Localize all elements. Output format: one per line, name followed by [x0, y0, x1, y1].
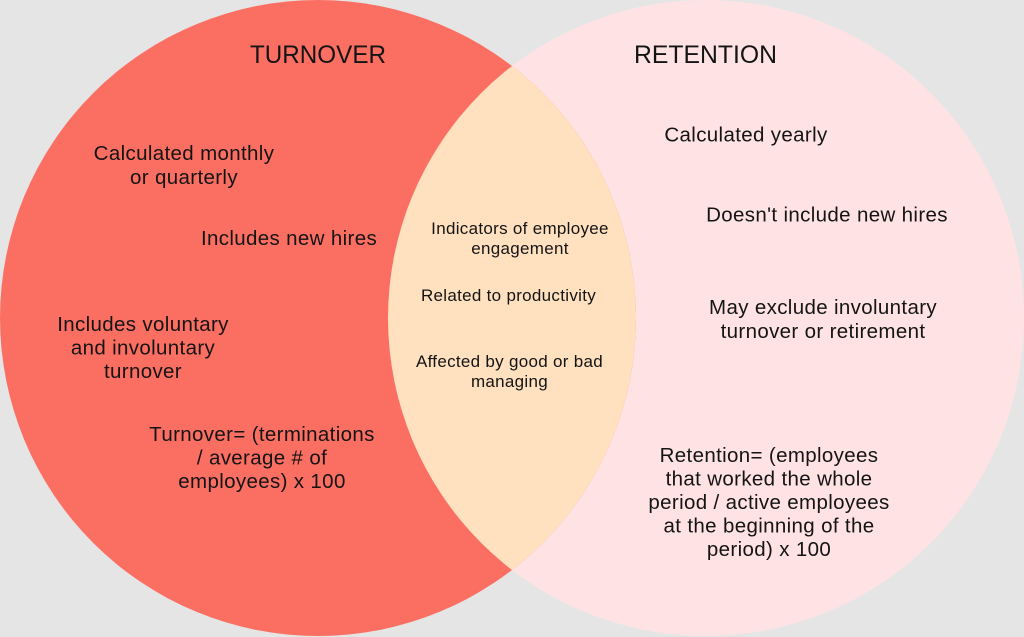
text: may exclude involuntary: turnover or retirement [721, 320, 925, 343]
text: voluntary and involuntary: and involuntary [71, 336, 216, 360]
heading: retention: RETENTION [634, 41, 777, 69]
text: turnover formula: employees) x 100 [178, 470, 346, 493]
text: voluntary and involuntary: turnover [104, 360, 182, 383]
text: voluntary and involuntary: Includes voluntary [57, 313, 229, 336]
text: calculated yearly: Calculated yearly [664, 124, 828, 146]
text: calculated monthly: Calculated monthly [94, 142, 274, 165]
circle: turnover [0, 0, 636, 636]
text: retention formula: that worked the whole [666, 468, 872, 490]
text: indicators of engagement: engagement [471, 239, 569, 258]
text: retention formula: period / active employees [648, 491, 890, 514]
text: doesn't include new hires: Doesn't include new hires [706, 204, 948, 226]
text: affected by managing: Affected by good or bad [416, 352, 603, 371]
text: turnover formula: Turnover= (terminations [149, 423, 375, 446]
text: calculated monthly: or quarterly [130, 166, 238, 189]
text: related to productivity: Related to productivity [421, 286, 596, 305]
text: affected by managing: managing [471, 372, 548, 391]
heading: turnover: TURNOVER [250, 41, 386, 69]
text: retention formula: at the beginning of the [664, 514, 874, 538]
overlap text blocks [416, 219, 609, 391]
circle: retention [388, 0, 1024, 636]
text: indicators of engagement: Indicators of employee [431, 219, 609, 238]
text: retention formula: period) x 100 [707, 538, 831, 561]
turnover text blocks [57, 142, 377, 493]
text: may exclude involuntary: May exclude involuntary [709, 296, 937, 319]
retention text blocks [648, 124, 948, 561]
text: retention formula: Retention= (employees [660, 444, 878, 467]
text: turnover formula: / average # of [197, 446, 327, 470]
text: includes new hires: Includes new hires [201, 227, 377, 250]
overlap region [388, 66, 636, 570]
